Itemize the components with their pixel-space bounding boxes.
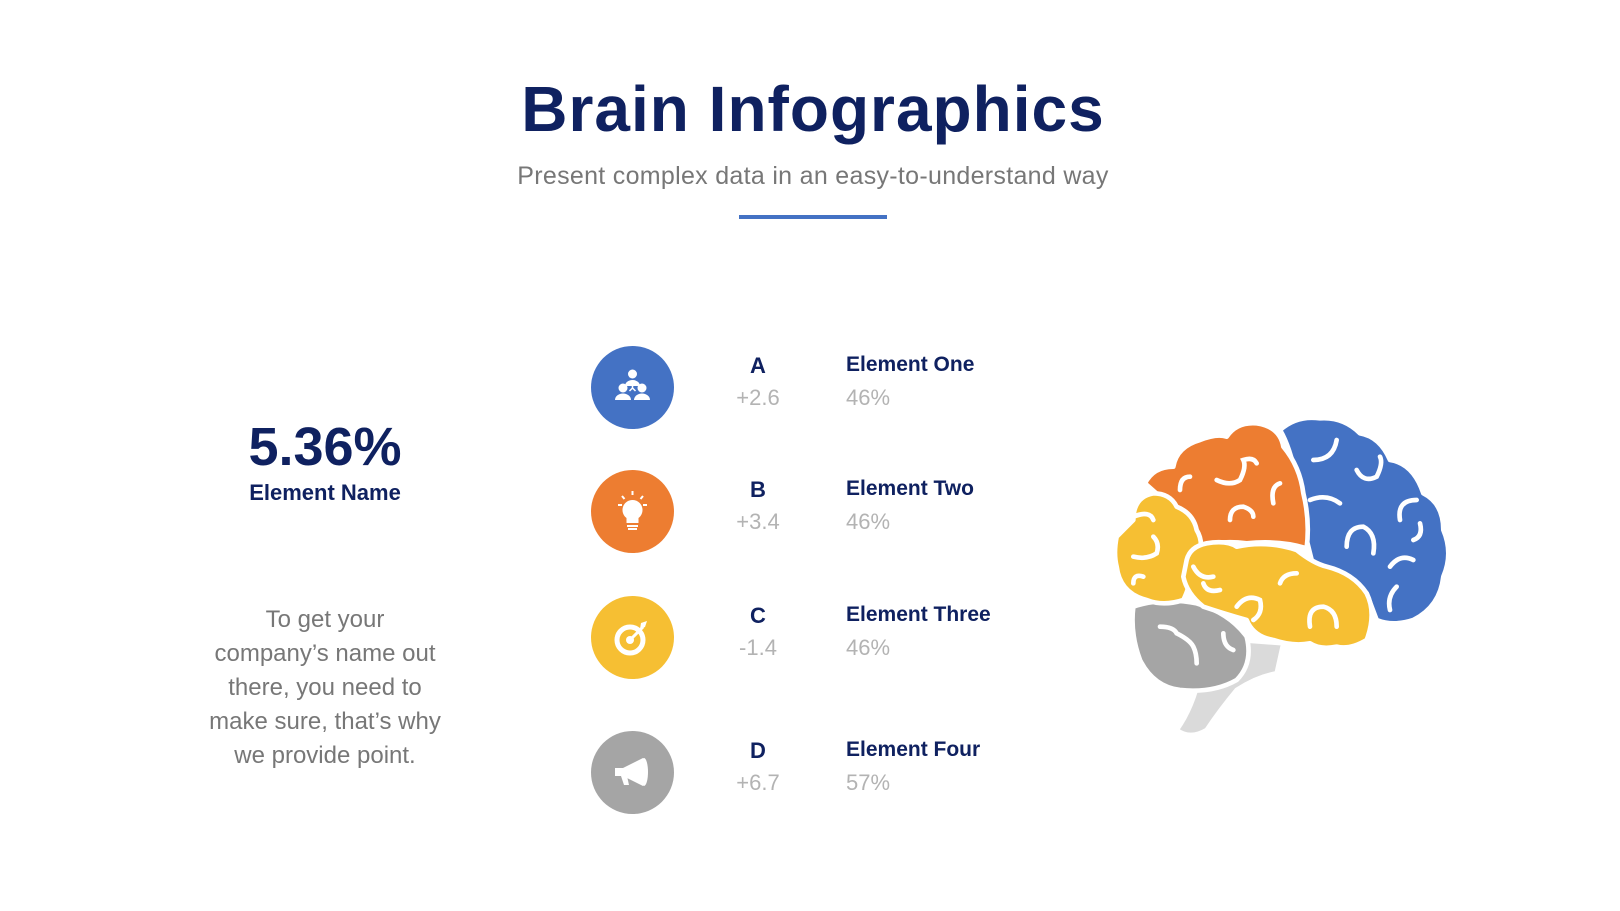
element two: Element Two (846, 477, 974, 500)
row D (591, 731, 980, 814)
icon: bulb (591, 470, 674, 553)
row B (591, 470, 974, 553)
stat value: 5.36% (248, 417, 402, 477)
description paragraph: make sure, that’s why (209, 708, 441, 735)
description paragraph: company’s name out (214, 640, 436, 667)
subtitle: Present complex data in an easy-to-understand way (517, 162, 1109, 190)
left stat block (248, 417, 402, 505)
description paragraph: To get your (266, 606, 384, 633)
description paragraph: there, you need to (228, 674, 422, 701)
row A (591, 346, 974, 429)
stat label: Element Name (249, 480, 401, 505)
value A: +2.6 (736, 385, 780, 410)
value B: +3.4 (736, 509, 780, 534)
value D: +6.7 (736, 770, 780, 795)
element three: Element Three (846, 603, 991, 626)
label B: B (750, 477, 766, 502)
brain illustration (1117, 420, 1446, 733)
row D: 57% (846, 770, 890, 795)
row C (591, 596, 991, 679)
label A: A (750, 353, 766, 378)
icon: target (591, 596, 674, 679)
element one: Element One (846, 353, 974, 376)
element four: Element Four (846, 738, 980, 761)
row A: 46% (846, 385, 890, 410)
description paragraph: we provide point. (234, 742, 416, 769)
title underline (739, 215, 887, 219)
description paragraph (209, 606, 441, 769)
label D: D (750, 738, 766, 763)
value C: -1.4 (739, 635, 777, 660)
title: Brain Infographics (521, 73, 1105, 145)
icon: team (591, 346, 674, 429)
row B: 46% (846, 509, 890, 534)
row C: 46% (846, 635, 890, 660)
label C: C (750, 603, 766, 628)
icon: megaphone (591, 731, 674, 814)
